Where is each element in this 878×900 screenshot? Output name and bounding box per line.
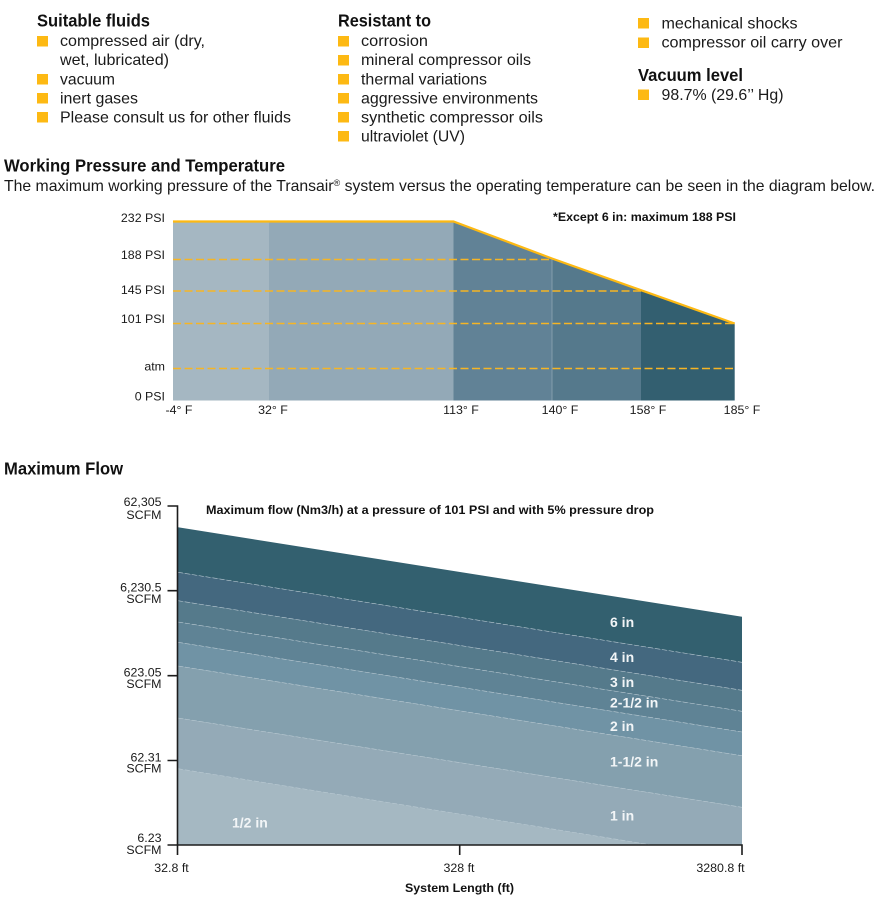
bullet list: resistant to	[338, 33, 543, 146]
bullet list: continued resistance	[638, 16, 842, 52]
chart title: Maximum flow (Nm3/h) at a pressure of 101 PSI and with 5% pressure drop	[206, 503, 654, 517]
x axis labels: 140° F	[542, 403, 579, 417]
bullet list: continued resistance: compressor oil carry over	[662, 34, 842, 52]
band: 1-1/2 in	[178, 666, 742, 807]
heading: maximum flow: Maximum Flow	[4, 458, 123, 478]
band labels: 1/2 in	[232, 814, 268, 830]
zone: 113 to 140 F	[454, 222, 552, 400]
band labels: 3 in	[610, 674, 634, 690]
vacuum level value: 98.7% (29.6’’ Hg)	[662, 87, 784, 104]
band: 1/2 in	[178, 769, 652, 845]
y axis labels: 188 PSI	[121, 248, 165, 262]
x axis labels: 3280.8 ft	[696, 861, 745, 875]
x axis labels: 185° F	[724, 403, 761, 417]
band labels: 1-1/2 in	[610, 754, 658, 770]
y axis labels	[121, 211, 165, 404]
panel: shocks and vacuum level	[638, 16, 842, 104]
bullet list: resistant to: corrosion	[361, 33, 428, 50]
bullet list: resistant to: aggressive environments	[361, 90, 538, 108]
bullet list: suitable fluids: inert gases	[60, 90, 138, 108]
y axis labels: 623.05	[124, 666, 162, 680]
y axis labels: 101 PSI	[121, 312, 165, 326]
band labels	[232, 614, 658, 830]
heading: working pressure and temperature: Working Pressure and Temperature	[4, 156, 285, 176]
x axis title: System Length (ft)	[405, 881, 514, 895]
text block: pressure description: The maximum working pressure of the Transair	[4, 178, 330, 195]
text block: pressure description: system versus the operating temperature can be seen in the diagram below.	[340, 178, 875, 195]
y axis labels: 62,305	[124, 495, 162, 509]
maximum pressure line	[173, 222, 735, 324]
heading: resistant to: Resistant to	[338, 10, 431, 30]
band labels: 6 in	[610, 614, 634, 630]
band: 2-1/2 in	[178, 622, 742, 732]
bullet list: suitable fluids	[37, 33, 291, 126]
band: 6 in	[178, 527, 742, 662]
heading: suitable fluids: Suitable fluids	[37, 10, 150, 30]
x axis labels: 32.8 ft	[154, 861, 189, 875]
y axis labels: SCFM	[126, 508, 162, 522]
x axis labels: 113° F	[443, 403, 479, 417]
y axis labels: SCFM	[126, 843, 162, 857]
chart: working pressure vs temperature	[121, 210, 761, 417]
zone: 140 to 158 F	[552, 259, 641, 400]
bullet list: continued resistance: mechanical shocks	[662, 16, 798, 32]
bullet list: suitable fluids: wet, lubricated)	[59, 52, 169, 69]
band labels: 2-1/2 in	[610, 694, 658, 710]
bullet list: resistant to: ultraviolet (UV)	[361, 128, 465, 146]
panel: resistant to	[338, 10, 543, 146]
band labels: 2 in	[610, 718, 634, 734]
chart: maximum flow vs system length	[120, 495, 745, 895]
y axis labels: atm	[144, 360, 165, 374]
band: 2 in	[178, 642, 742, 756]
band: 4 in	[178, 572, 742, 690]
x axis labels: 328 ft	[443, 861, 475, 875]
bullet list: suitable fluids: compressed air (dry,	[60, 33, 205, 50]
band: 3 in	[178, 601, 742, 711]
bullet list: suitable fluids: vacuum	[60, 72, 115, 88]
zone: 158 to 185 F	[641, 291, 735, 400]
zone: -4 to 32 F	[173, 222, 269, 400]
x axis labels	[154, 861, 745, 875]
heading: vacuum level: Vacuum level	[638, 65, 743, 85]
y axis labels: SCFM	[126, 592, 162, 606]
y axis labels: 145 PSI	[121, 283, 165, 297]
footnote: *Except 6 in: maximum 188 PSI	[553, 210, 736, 224]
y axis labels: 0 PSI	[135, 390, 165, 404]
band: 1 in	[178, 718, 742, 845]
bullet list: resistant to: thermal variations	[361, 72, 487, 88]
text block: pressure description: ®	[334, 178, 341, 188]
zone: 32 to 113 F	[269, 222, 454, 400]
bullet list: resistant to: synthetic compressor oils	[361, 110, 543, 126]
y axis labels: 6.23	[137, 831, 162, 845]
y axis labels: SCFM	[126, 677, 162, 691]
y axis labels: 6,230.5	[120, 580, 162, 594]
y axis labels	[120, 495, 162, 857]
panel: suitable fluids	[37, 10, 291, 126]
x axis labels: 32° F	[258, 403, 288, 417]
axes and ticks	[168, 506, 742, 855]
y axis labels: SCFM	[126, 762, 162, 776]
bullet list: resistant to: mineral compressor oils	[361, 52, 531, 69]
x axis labels: -4° F	[166, 403, 193, 417]
x axis labels: 158° F	[630, 403, 667, 417]
bullet list: suitable fluids: Please consult us for other fluids	[60, 110, 291, 126]
x axis labels	[166, 403, 761, 417]
y axis labels: 232 PSI	[121, 211, 165, 225]
band labels: 4 in	[610, 649, 634, 665]
band labels: 1 in	[610, 808, 634, 824]
y axis labels: 62.31	[130, 750, 162, 764]
